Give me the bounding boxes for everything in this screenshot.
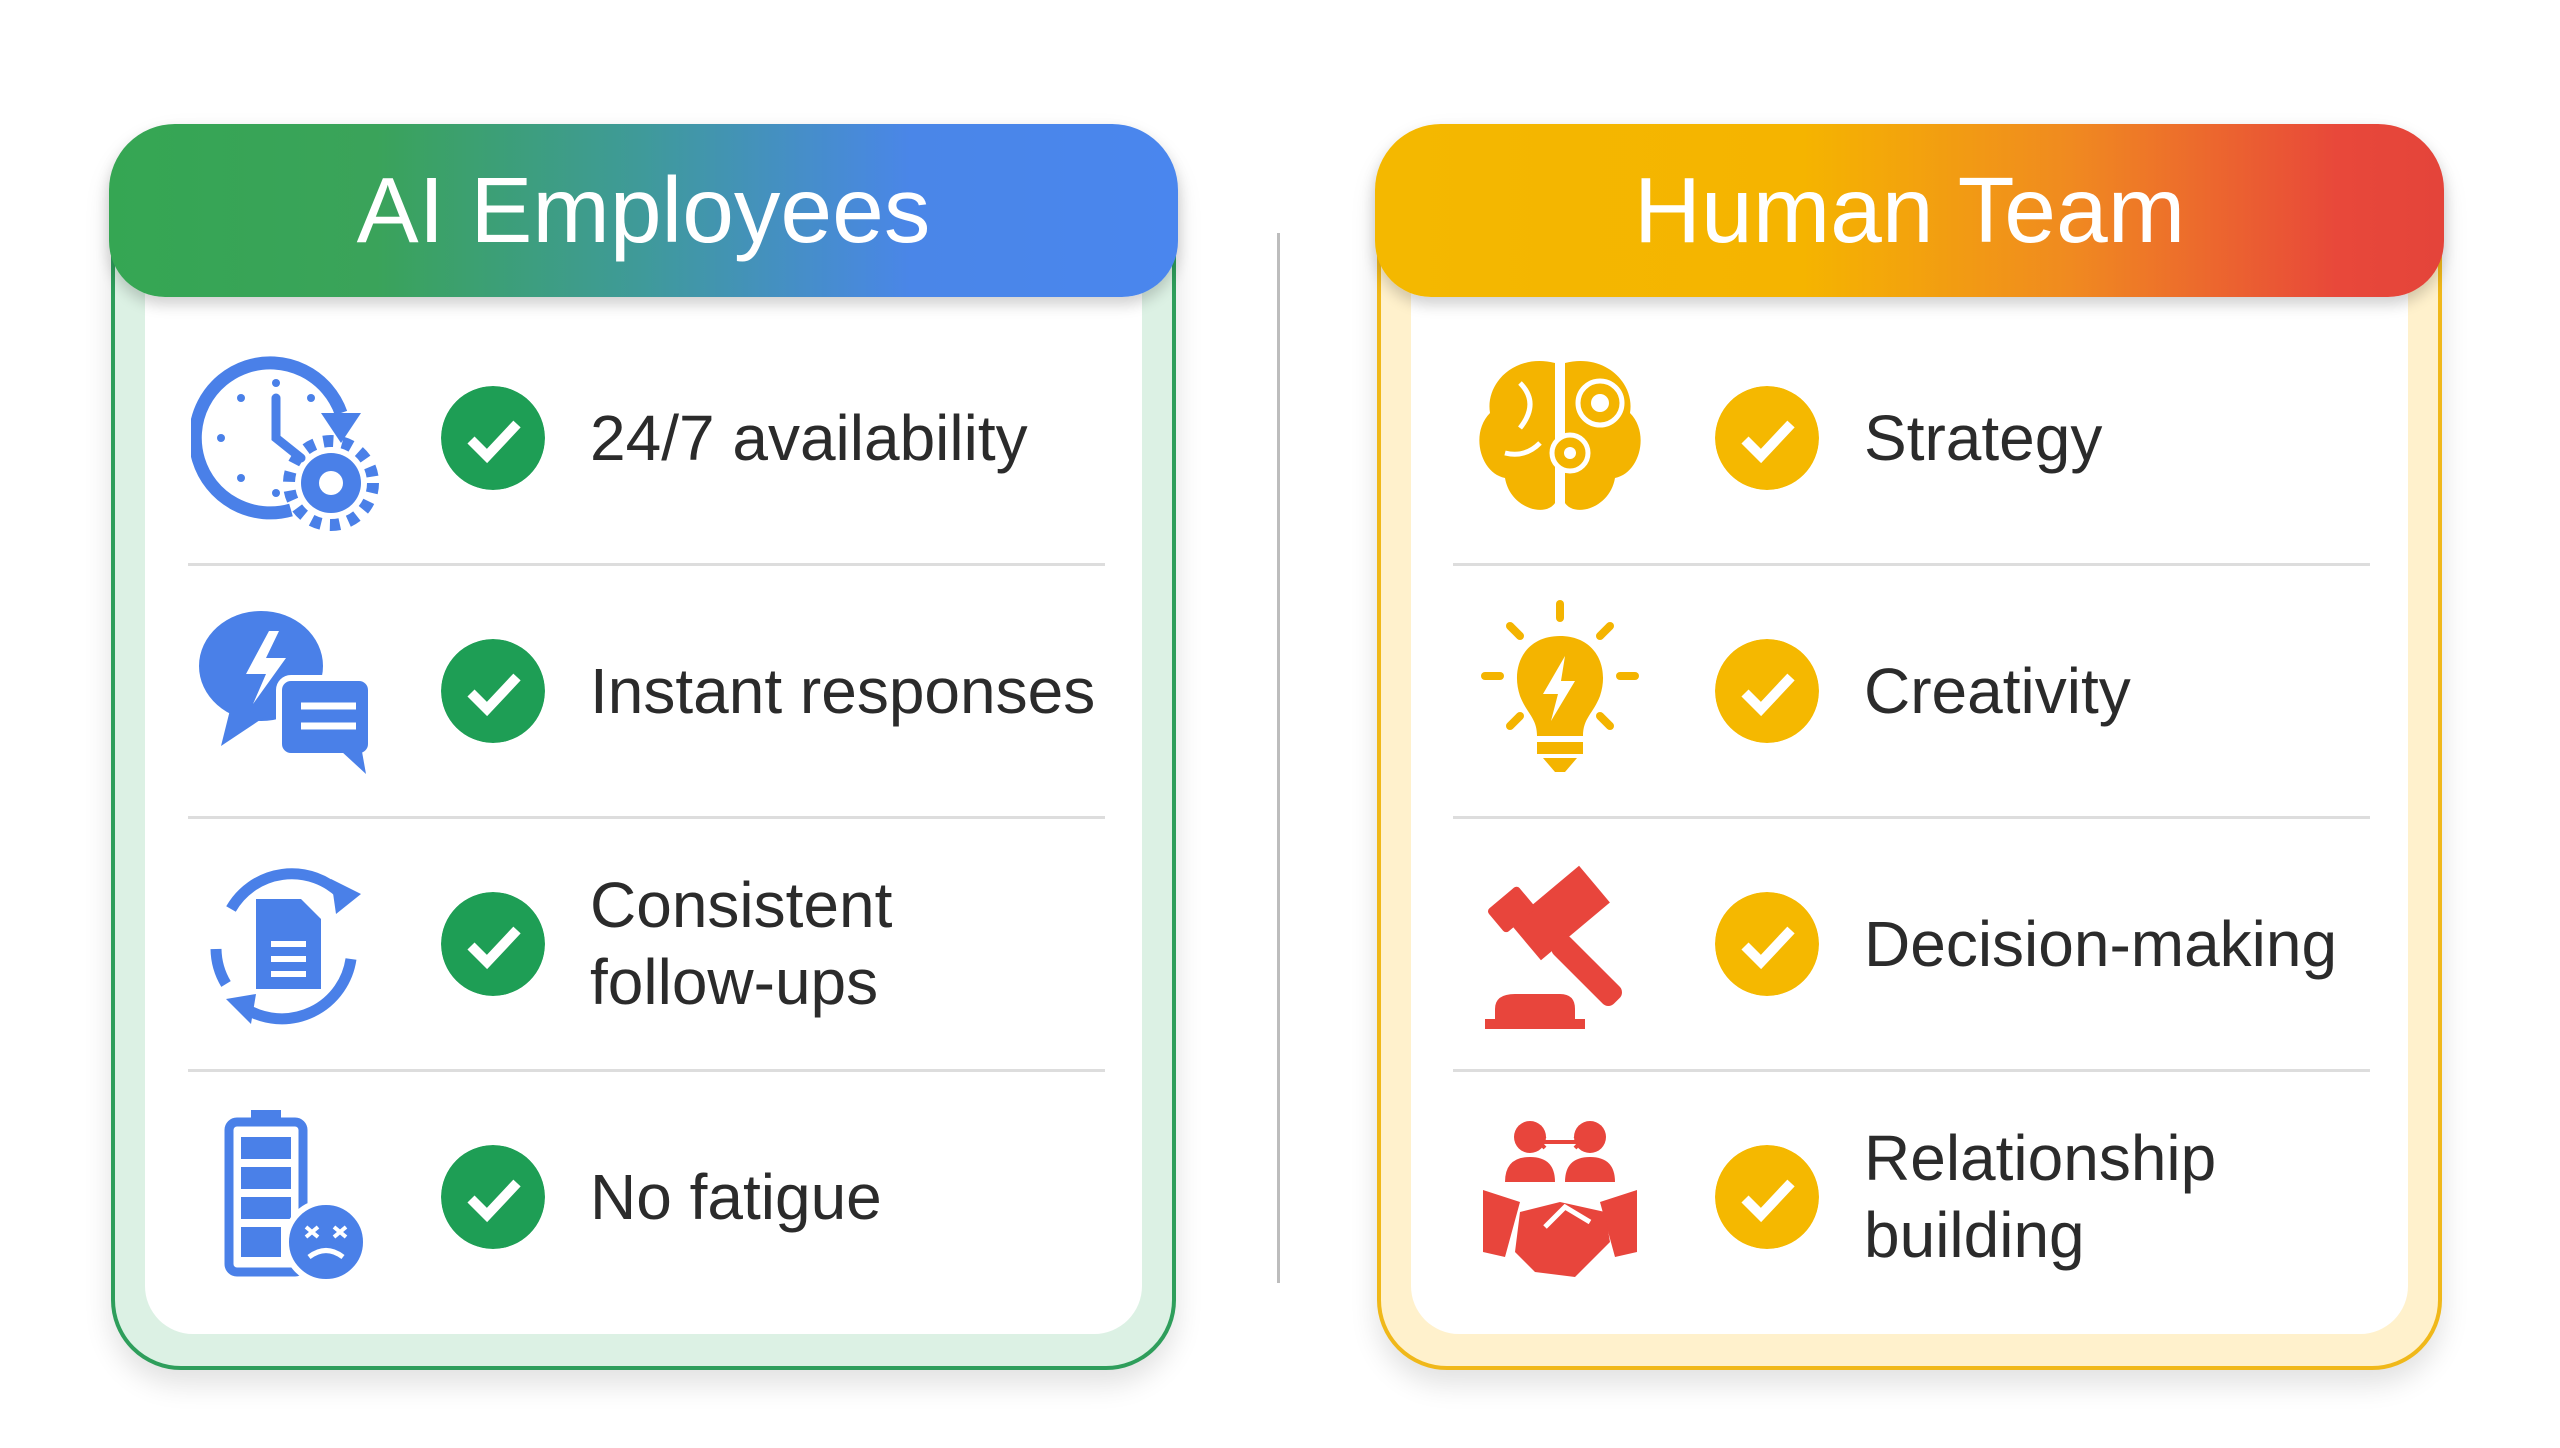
heading: AI Employees: AI Employees bbox=[357, 158, 930, 262]
panel: Human Team bbox=[1377, 124, 2442, 1370]
text: 24/7 availability: 24/7 availability bbox=[590, 402, 1028, 474]
text: Consistent follow-ups: Consistent bbox=[590, 869, 892, 941]
heading: Human Team: Human Team bbox=[1634, 158, 2185, 262]
checks left bbox=[441, 386, 545, 490]
text: Relationship building: Relationship bbox=[1864, 1122, 2216, 1194]
text: Instant responses: Instant responses bbox=[590, 655, 1095, 727]
text: Decision-making: Decision-making bbox=[1864, 908, 2337, 980]
icon: battery with tired face bbox=[224, 1110, 363, 1279]
panel: AI Employees bbox=[111, 124, 1176, 1370]
icon: clock with gear bbox=[191, 356, 379, 531]
divider bbox=[1277, 233, 1280, 1283]
text: Consistent follow-ups bbox=[590, 869, 892, 1018]
heading: Human Team bbox=[1375, 124, 2444, 297]
icon: handshake bbox=[1483, 1121, 1637, 1277]
icon: gavel bbox=[1485, 866, 1622, 1029]
text: Creativity: Creativity bbox=[1864, 655, 2131, 727]
text: Relationship building: building bbox=[1864, 1199, 2085, 1271]
icon: light bulb bbox=[1481, 600, 1639, 772]
text: Relationship building bbox=[1864, 1122, 2216, 1271]
text: Strategy: Strategy bbox=[1864, 402, 2102, 474]
icon: brain with gears bbox=[1479, 361, 1641, 510]
icon: chat bubbles bbox=[199, 611, 368, 774]
text: Consistent follow-ups: follow-ups bbox=[590, 946, 878, 1018]
text: No fatigue: No fatigue bbox=[590, 1161, 882, 1233]
icon: document cycle bbox=[210, 868, 361, 1024]
heading: AI Employees bbox=[109, 124, 1178, 297]
checks right bbox=[1715, 386, 1819, 490]
